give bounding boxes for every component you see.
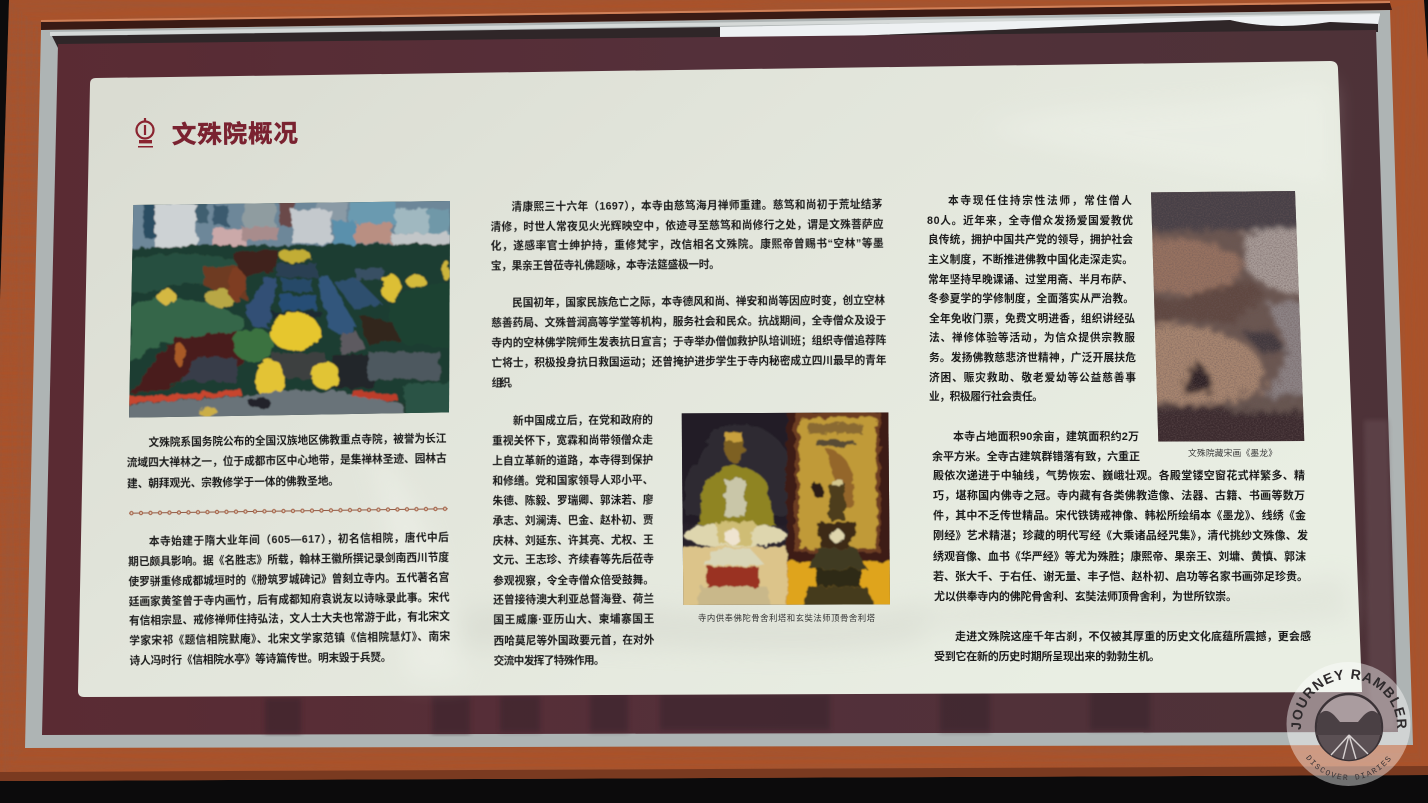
top silver highlight [50, 13, 1380, 36]
beaded divider [129, 509, 447, 513]
history paragraph [128, 531, 451, 667]
New China paragraph: 新中国成立后，在党和政府的 [513, 413, 653, 427]
Republican era paragraph: 寺内的空林佛学院师生发表抗日宣言；于寺举办僧伽救护队培训班；组织寺僧追荐阵 [491, 334, 887, 349]
closing paragraph [934, 629, 1311, 663]
caption: relic stupas: 寺内供奉佛陀骨舍利塔和玄奘法师顶骨舍利塔 [698, 613, 876, 623]
history paragraph: 学家宋祁《题信相院默庵》、北宋文学家范镇《信相院慧灯》、南宋 [129, 630, 451, 647]
site and collections paragraph: 尤以供奉寺内的佛陀骨舍利、玄奘法师顶骨舍利，为世所钦崇。 [934, 589, 1237, 603]
Qing dynasty paragraph: 清康熙三十六年（1697），本寺由慈笃海月禅师重建。慈笃和尚初于荒址结茅 [511, 198, 883, 213]
closing paragraph: 受到它在新的历史时期所呈现出来的勃勃生机。 [934, 649, 1160, 663]
New China paragraph: 交流中发挥了特殊作用。 [494, 654, 605, 667]
temple roofs [277, 263, 317, 277]
Republican era paragraph [491, 294, 887, 389]
closing paragraph: 走进文殊院这座千年古刹，不仅被其厚重的历史文化底蕴所震撼，更会感 [955, 629, 1311, 643]
badge tagline: DISCOVER DIARIES [1306, 754, 1390, 780]
faint ink mountains [365, 85, 1350, 680]
middle column text [490, 198, 889, 667]
cream panel [78, 61, 1362, 697]
Qing dynasty paragraph: 清修，时世人常夜见火光辉映空中，依迹寻至慈笃和尚修行之处，谓是文殊菩萨应 [491, 218, 884, 233]
New China paragraph: 重视关怀下，宽霖和尚带领僧众走 [492, 433, 653, 447]
dark top reflection [52, 20, 1378, 48]
history paragraph: 本寺始建于隋大业年间（605—617），初名信相院，唐代中后 [149, 531, 449, 548]
Qing dynasty paragraph: 宝，果亲王曾莅寺礼佛题咏，本寺法筵盛极一时。 [491, 258, 720, 272]
New China paragraph: 还曾接待澳大利亚总督海登、荷兰 [493, 592, 655, 606]
New China paragraph: 文元、王志珍、齐续春等先后莅寺 [493, 552, 654, 566]
painting texture [1152, 191, 1304, 442]
history paragraph: 使罗骈重修成都城垣时的《刱筑罗城碑记》曾刻立寺内。五代著名宫 [128, 571, 449, 588]
New China paragraph: 承志、刘澜涛、巴金、赵朴初、贾 [493, 513, 654, 527]
right edge reflection [1364, 420, 1395, 730]
intro paragraph: 建、朝拜观光、宗教修学于一体的佛教圣地。 [127, 474, 339, 490]
history paragraph: 廷画家黄筌曾于寺内画竹，后有成都知府袁说友以诗咏录此事。宋代 [129, 591, 450, 608]
photo: Buddha relic stupas [682, 412, 890, 605]
present day paragraph: 济困、赈灾救助、敬老爱幼等公益慈善事 [929, 371, 1136, 384]
Qing dynasty paragraph [490, 198, 884, 272]
caption: Ink Dragon: 文殊院藏宋画《墨龙》 [1188, 447, 1277, 458]
heading: 文殊院概况 [172, 120, 298, 149]
history paragraph: 诗人冯时行《信相院水亭》等诗篇传世。明末毁于兵燹。 [129, 651, 392, 667]
trees [233, 328, 274, 362]
New China paragraph [492, 413, 655, 667]
New China paragraph: 参观视察，令全寺僧众倍受鼓舞。 [493, 573, 654, 587]
New China paragraph: 和修缮。党和国家领导人邓小平、 [492, 473, 653, 487]
intro paragraph [126, 432, 447, 490]
present day paragraph: 80人。近年来，全寺僧众发扬爱国爱教优 [927, 214, 1133, 227]
present day paragraph: 法、禅修体验等活动，为信众提供宗教服 [929, 331, 1135, 344]
photo: aerial view of the temple [129, 201, 450, 418]
intro paragraph: 流域四大禅林之一，位于成都市区中心地带，是集禅林圣迹、园林古 [127, 452, 447, 469]
Republican era paragraph: 民国初年，国家民族危亡之际，本寺德风和尚、禅安和尚等因应时变，创立空林 [512, 294, 885, 309]
site and collections paragraph: 绣观音像、血书《华严经》等尤为殊胜；康熙帝、果亲王、刘墉、黄慎、郭沫 [933, 549, 1306, 563]
present day paragraph: 务。发扬佛教慈悲济世精神，广泛开展扶危 [929, 351, 1136, 364]
right column text [927, 194, 1311, 663]
site and collections paragraph: 刚经》艺术精湛；珍藏的明代写经《大乘诸品经咒集》，清代挑纱文殊像、发 [933, 528, 1308, 542]
Republican era paragraph: 慈善药局、文殊普润高等学堂等机构，服务社会和民众。抗战期间，全寺僧众及设于 [491, 314, 887, 329]
Republican era paragraph: 组织。 [492, 376, 519, 389]
title block [136, 118, 298, 149]
photo: Song dynasty Ink Dragon painting [1151, 191, 1304, 442]
present day paragraph [927, 194, 1136, 403]
left column text [126, 432, 451, 667]
sky reflection at top [720, 14, 1380, 40]
right stupa [829, 483, 845, 520]
New China paragraph: 西哈莫尼等外国政要元首，在对外 [493, 633, 655, 647]
New China paragraph: 国王威廉·亚历山大、柬埔寨国王 [493, 612, 655, 626]
people reflection on mat [265, 690, 1150, 734]
present day paragraph: 常年坚持早晚课诵、过堂用斋、半月布萨、 [928, 273, 1133, 286]
present day paragraph: 冬参夏学的学修制度，全面落实从严治教。 [928, 292, 1134, 305]
tree canopy [125, 244, 458, 402]
site and collections paragraph: 件，其中不乏传世精品。宋代铁铸戒神像、韩松所绘绢本《墨龙》、线绣《金 [933, 508, 1306, 522]
badge title: JOURNEY RAMBLER [1291, 669, 1407, 730]
New China paragraph: 朱德、陈毅、罗瑞卿、郭沫若、廖 [492, 493, 654, 507]
present day paragraph: 全年免收门票，免费文明进香，组织讲经弘 [929, 312, 1135, 325]
intro paragraph: 文殊院系国务院公布的全国汉族地区佛教重点寺院，被誉为长江 [148, 432, 447, 449]
left stupa [725, 480, 745, 517]
New China paragraph: 上自立革新的道路，本寺得到保护 [492, 453, 653, 467]
site and collections paragraph: 余平方米。全寺古建筑群错落有致，六重正 [932, 449, 1140, 463]
site and collections paragraph: 巧，堪称国内佛寺之冠。寺内藏有各类佛教造像、法器、古籍、书画等数万 [933, 488, 1305, 502]
history paragraph: 有信相宗显、戒修禅师住持弘法，文人士大夫也常游于此，有北宋文 [129, 610, 450, 627]
Qing dynasty paragraph: 化，遂感率官士绅护持，重修梵宇，改信相名文殊院。康熙帝曾赐书“空林”等墨 [491, 237, 884, 252]
site and collections paragraph: 本寺占地面积90余亩，建筑面积约2万 [953, 429, 1139, 443]
site and collections paragraph [932, 429, 1308, 603]
present day paragraph: 主义制度，不断推进佛教中国化走深走实。 [928, 253, 1133, 266]
icon: temple emblem [136, 118, 154, 148]
present day paragraph: 本寺现任住持宗性法师，常住僧人 [948, 194, 1132, 207]
site and collections paragraph: 若、张大千、于右任、谢无量、丰子恺、赵朴初、启功等名家书画弥足珍贵。 [933, 569, 1308, 583]
New China paragraph: 庆林、刘延东、许其亮、尤权、王 [493, 533, 654, 547]
watermark badge: Journey Rambler [1286, 662, 1410, 786]
ground and red wall [129, 388, 405, 418]
Republican era paragraph: 亡将士，积极投身抗日救国运动；还曾掩护进步学生于寺内秘密成立四川最早的青年 [491, 354, 887, 369]
present day paragraph: 业，积极履行社会责任。 [929, 390, 1043, 403]
site and collections paragraph: 殿依次递进于中轴线，气势恢宏、巍峨壮观。各殿堂镂空窗花式样繁多、精 [933, 468, 1305, 482]
icon: landscape roundel [1316, 694, 1382, 760]
present day paragraph: 良传统，拥护中国共产党的领导，拥护社会 [928, 233, 1133, 246]
history paragraph: 期已颇具影响。据《名胜志》所载，翰林王徽所撰记录剑南西川节度 [128, 551, 450, 568]
